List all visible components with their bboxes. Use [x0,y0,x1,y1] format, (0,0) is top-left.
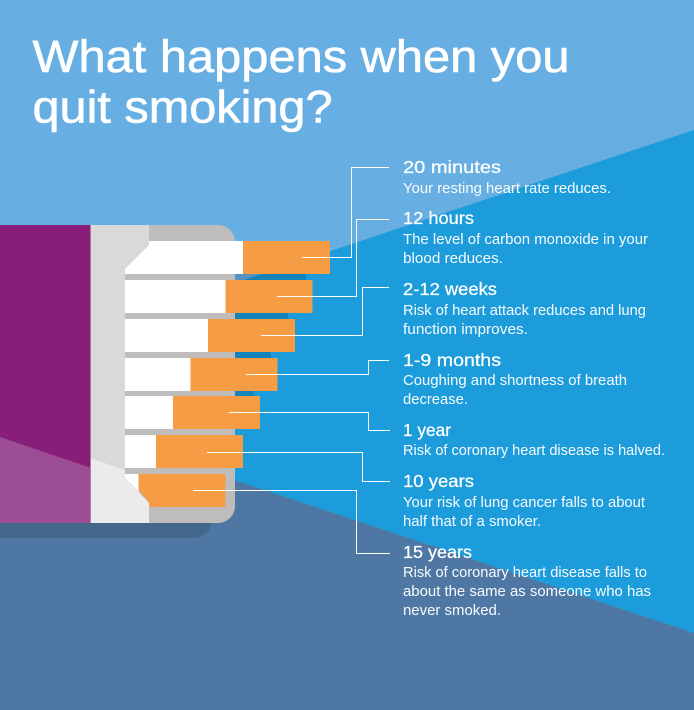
milestone: 10 years [403,471,645,530]
connector lines [193,168,390,554]
milestone: 12 hours: blood reduces. [403,251,503,267]
milestone: 15 years: never smoked. [403,603,501,619]
cigarette 5 [125,396,260,429]
milestone: 2-12 weeks: function improves. [403,322,528,338]
cigarette 1 [125,241,330,274]
milestone: 20 minutes: Your resting heart rate reduces. [403,181,611,197]
milestone: 1 year [403,420,665,459]
milestone: 1-9 months: decrease. [403,392,468,408]
title [32,31,570,132]
milestone: 20 minutes [403,157,611,197]
milestone: 10 years: half that of a smoker. [403,514,541,530]
pack shadow [0,523,211,538]
milestone: 12 hours [403,208,648,267]
pack flap [91,225,149,523]
cigarette 4 [125,358,278,391]
milestone: 20 minutes: 20 minutes [403,157,501,177]
milestone: 12 hours: The level of carbon monoxide in your [403,232,648,248]
title: quit smoking? [32,82,332,132]
milestone: 1 year: Risk of coronary heart disease is halved. [403,443,665,459]
milestone: 1-9 months: Coughing and shortness of breath [403,373,627,389]
pack body [91,225,235,523]
milestone: 12 hours: 12 hours [403,208,474,228]
cigarette 2 [125,280,312,313]
cigarette shadows [235,274,306,396]
milestone: 1-9 months: 1-9 months [403,350,501,370]
milestone: 10 years: Your risk of lung cancer falls to about [403,495,645,511]
cigarette 3 [125,319,295,352]
milestone: 2-12 weeks [403,279,646,338]
purple pack front [0,225,91,523]
milestone: 15 years [403,542,651,619]
cigarette 6 [125,435,243,468]
milestone: 15 years: about the same as someone who has [403,584,651,600]
milestone: 2-12 weeks: 2-12 weeks [403,279,497,299]
milestone: 2-12 weeks: Risk of heart attack reduces and lung [403,303,646,319]
cigarette 7 [125,474,226,507]
title: What happens when you [32,31,570,82]
milestone: 15 years: Risk of coronary heart disease falls to [403,565,647,581]
milestone: 15 years: 15 years [403,542,472,562]
milestone: 1-9 months [403,350,627,408]
milestone: 10 years: 10 years [403,471,474,491]
milestone: 1 year: 1 year [403,420,451,440]
cigarette pack illustration [0,225,330,538]
